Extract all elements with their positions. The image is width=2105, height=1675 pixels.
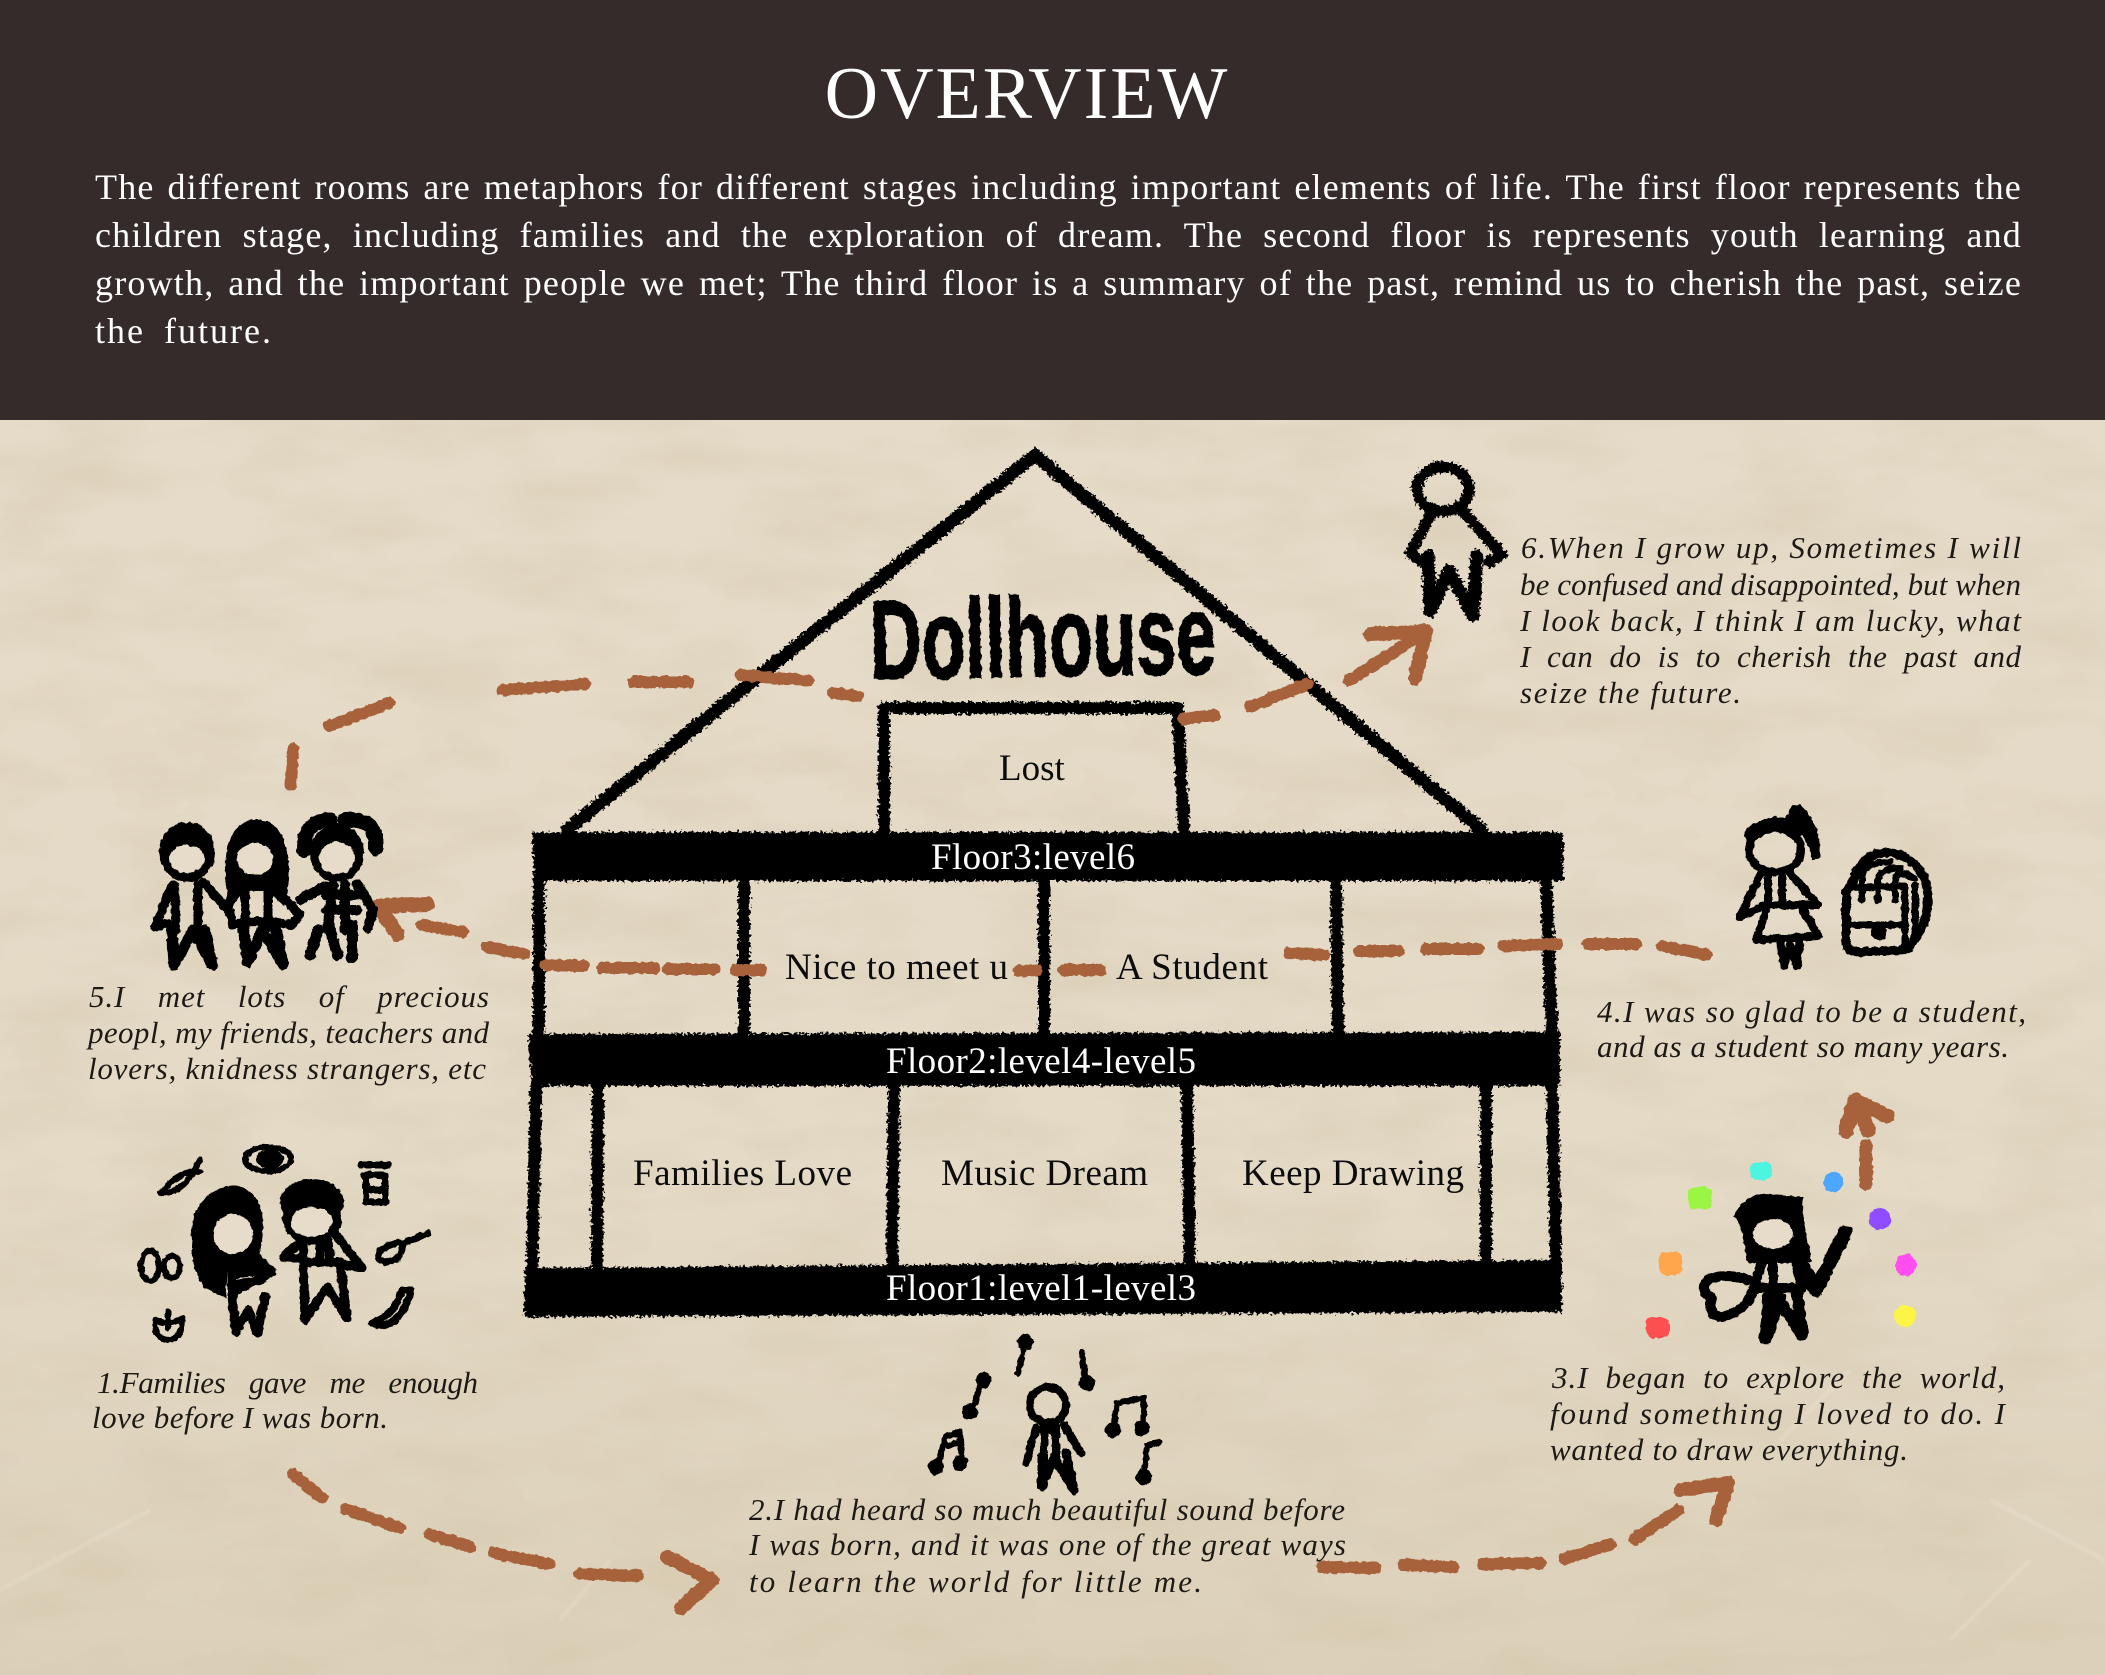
figure: student with backpack	[1740, 804, 1928, 966]
text: step 2: to learn the world for little me.	[749, 1564, 1202, 1599]
food: bread	[361, 1165, 388, 1202]
colour dots	[1646, 1162, 1917, 1338]
painter	[1704, 1194, 1845, 1338]
paper background	[0, 420, 2105, 1675]
mother	[192, 1185, 272, 1333]
arrow: step 4 to step 5	[379, 904, 1707, 971]
room: Nice to meet u: Nice to meet u	[785, 947, 1008, 988]
overview paragraph: children stage, including families and the exploration of dream. The second floor is represents youth learning and	[95, 215, 2022, 255]
text: step 6: be confused and disappointed, but when	[1520, 567, 2021, 602]
text: step 5: 5.I met lots of precious	[89, 979, 489, 1014]
text: step 4	[1597, 994, 2026, 1064]
food: chicken leg	[378, 1234, 427, 1262]
house title: Dollhouse: Dollhouse	[869, 572, 1217, 703]
student	[1740, 804, 1820, 966]
food: egg	[245, 1147, 291, 1171]
text: step 3	[1550, 1360, 2007, 1467]
floor 3 bar	[532, 832, 1563, 881]
food: banana	[372, 1290, 411, 1326]
text: step 3: wanted to draw everything.	[1550, 1432, 1908, 1467]
text: step 6: seize the future.	[1520, 675, 1741, 710]
friend one	[155, 823, 230, 965]
title: OVERVIEW	[825, 53, 1229, 135]
arrow: step 5 to step 6	[291, 631, 1426, 785]
text: step 6: 6.When I grow up, Sometimes I will	[1521, 530, 2021, 565]
overview paragraph: growth, and the important people we met; The third floor is a summary of the past, remind us to cherish the past, seize	[95, 263, 2022, 303]
room: Lost: Lost	[999, 748, 1066, 789]
text: step 2	[748, 1492, 1346, 1599]
overview paragraph: the future.	[95, 311, 273, 351]
room: Music Dream: Music Dream	[941, 1153, 1148, 1194]
house structure	[524, 455, 1563, 1317]
food: apple	[155, 1312, 182, 1340]
figure: child with music notes	[931, 1337, 1159, 1490]
text: step 2: I was born, and it was one of the great ways	[748, 1527, 1346, 1562]
header band	[0, 0, 2105, 420]
music notes	[931, 1337, 1159, 1482]
child	[1026, 1387, 1081, 1490]
text: step 5	[86, 979, 490, 1086]
room and floor labels	[633, 748, 1464, 1309]
room: A Student: A Student	[1116, 947, 1269, 988]
friend three	[300, 820, 376, 958]
floor 1 walls and dividers	[532, 1086, 1556, 1268]
father	[280, 1179, 362, 1320]
figure: mother and father with food	[141, 1147, 427, 1340]
floor 1 bar	[524, 1260, 1562, 1317]
arrow: step 3 to step 4	[1846, 1100, 1887, 1184]
overview paragraph: The different rooms are metaphors for different stages including important elements of life. The first floor represents the	[95, 167, 2022, 207]
text: step 6: I look back, I think I am lucky, what	[1519, 603, 2022, 638]
text: step 4: 4.I was so glad to be a student,	[1597, 994, 2026, 1029]
text: step 1: love before I was born.	[92, 1400, 388, 1435]
figure: person 6	[1410, 467, 1502, 615]
text: step 4: and as a student so many years.	[1597, 1029, 2009, 1064]
food: eggs	[141, 1251, 180, 1281]
floor label 1: Floor1:level1-level3	[886, 1268, 1196, 1309]
overview paragraph	[95, 167, 2022, 351]
room: Families Love: Families Love	[633, 1153, 852, 1194]
text: step 5: lovers, knidness strangers, etc	[88, 1051, 486, 1086]
text: step 2: 2.I had heard so much beautiful sound before	[749, 1492, 1345, 1527]
roof	[567, 455, 1482, 830]
floor 2 walls and dividers	[539, 880, 1552, 1035]
arrow: step 2 to step 3	[1322, 1483, 1728, 1568]
floor 2 bar	[528, 1032, 1560, 1086]
lost room walls	[884, 708, 1184, 836]
figure: painter with colour dots	[1646, 1162, 1917, 1338]
figure: three friends	[155, 820, 376, 965]
backpack	[1846, 852, 1928, 952]
text: step 6	[1519, 530, 2022, 710]
text: step 3: 3.I began to explore the world,	[1551, 1360, 2005, 1395]
text: step 6: I can do is to cherish the past and	[1519, 639, 2022, 674]
arrow: step 1 to step 2	[293, 1474, 712, 1608]
food: fish	[161, 1160, 200, 1193]
floor label 2: Floor2:level4-level5	[886, 1041, 1196, 1082]
text: step 1: 1.Families gave me enough	[97, 1365, 478, 1400]
floor label 3: Floor3:level6	[931, 837, 1135, 878]
room: Keep Drawing: Keep Drawing	[1242, 1153, 1464, 1194]
text: step 1	[92, 1365, 478, 1435]
text: step 5: peopl, my friends, teachers and	[86, 1015, 490, 1050]
text: step 3: found something I loved to do. I	[1550, 1396, 2007, 1431]
friend two	[226, 820, 300, 964]
